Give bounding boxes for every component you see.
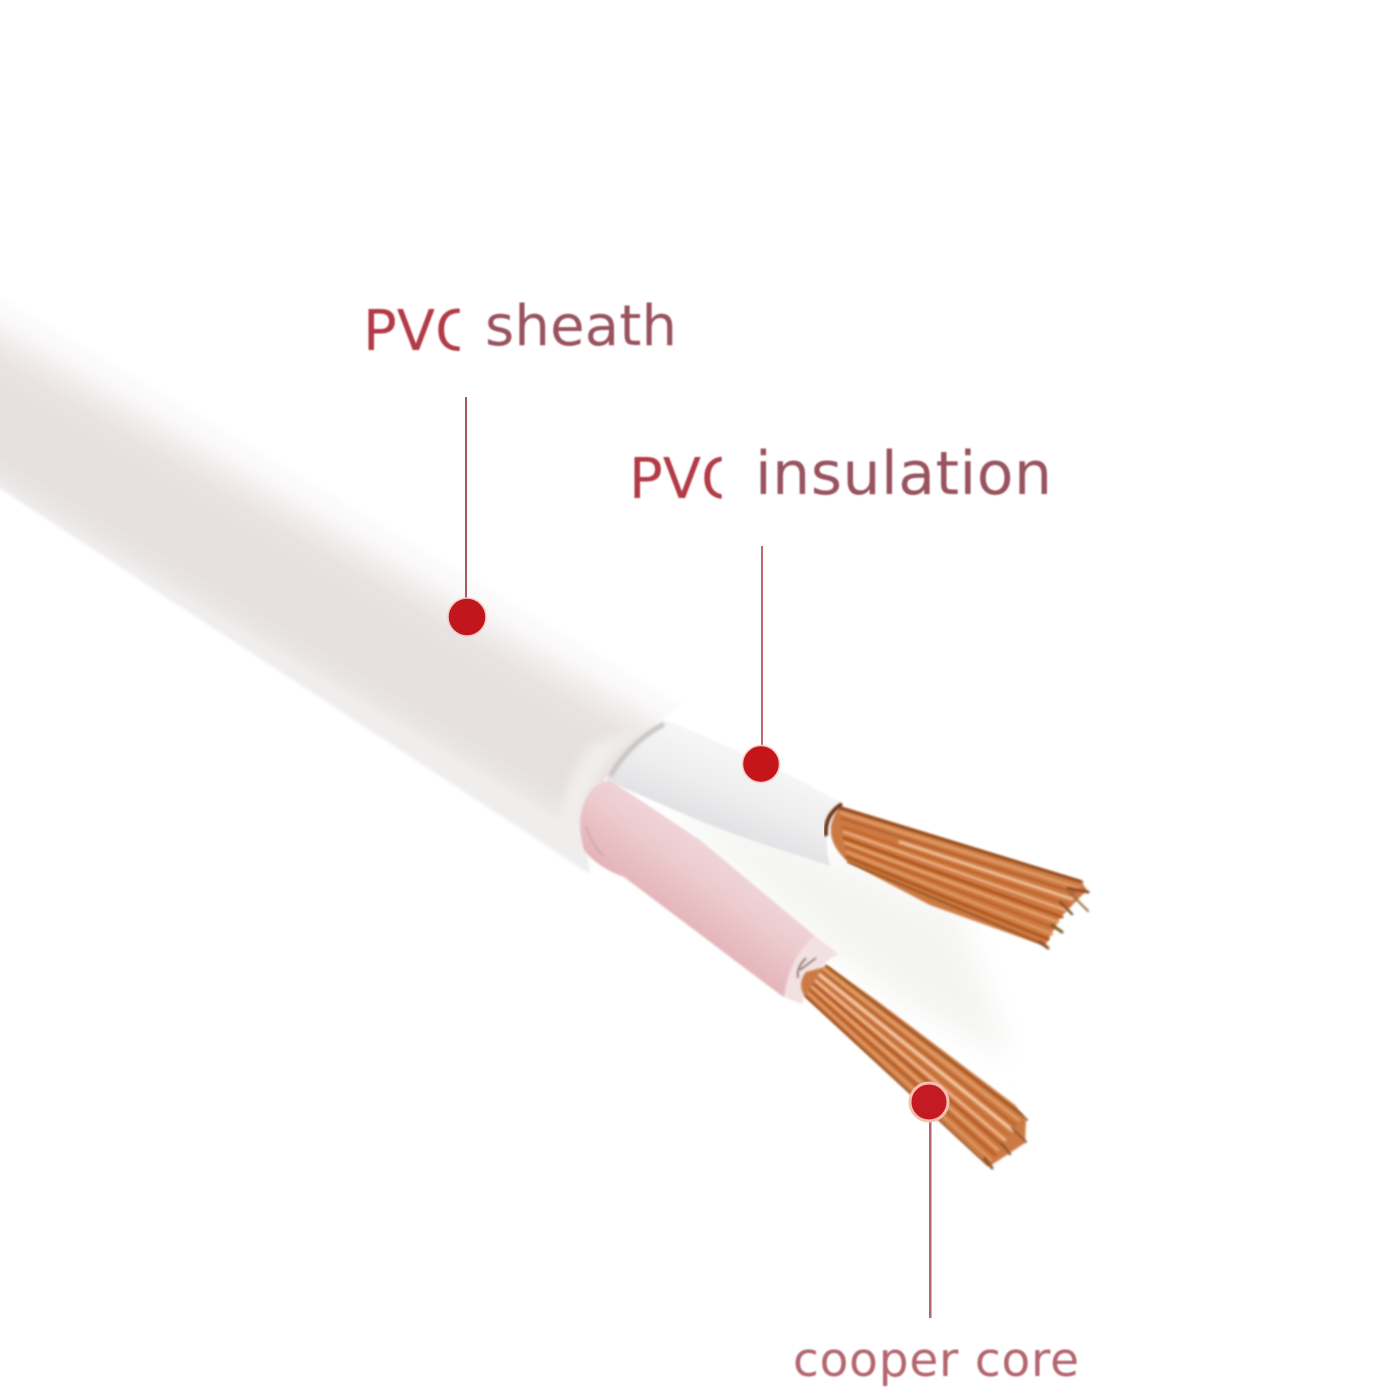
pink insulated wire (580, 780, 838, 1004)
outer PVC sheath (0, 280, 690, 874)
leader line: cooper core (929, 1120, 932, 1318)
marker: cooper core (910, 1083, 948, 1121)
marker: PVC insulation (742, 746, 780, 782)
leader line: PVC sheath (465, 397, 467, 602)
white insulated wire (606, 720, 842, 866)
lower copper core (801, 966, 1027, 1168)
label: PVC insulation: insulation (755, 439, 1052, 509)
label: PVC insulation (629, 439, 1052, 512)
sheath end highlight (559, 722, 655, 865)
label: PVC insulation: PVC (629, 447, 740, 512)
label: PVC sheath: PVC (363, 299, 474, 364)
marker: PVC sheath (448, 598, 486, 636)
label: PVC sheath (363, 294, 677, 364)
upper copper core (826, 804, 1088, 948)
cable illustration (0, 280, 1088, 1168)
label: PVC sheath: sheath (485, 294, 677, 359)
soft shadow between wires (660, 800, 1010, 1060)
sheath opening shadow (610, 724, 664, 776)
leader line: PVC insulation (761, 546, 763, 750)
label: cooper core: cooper core (793, 1333, 1079, 1388)
